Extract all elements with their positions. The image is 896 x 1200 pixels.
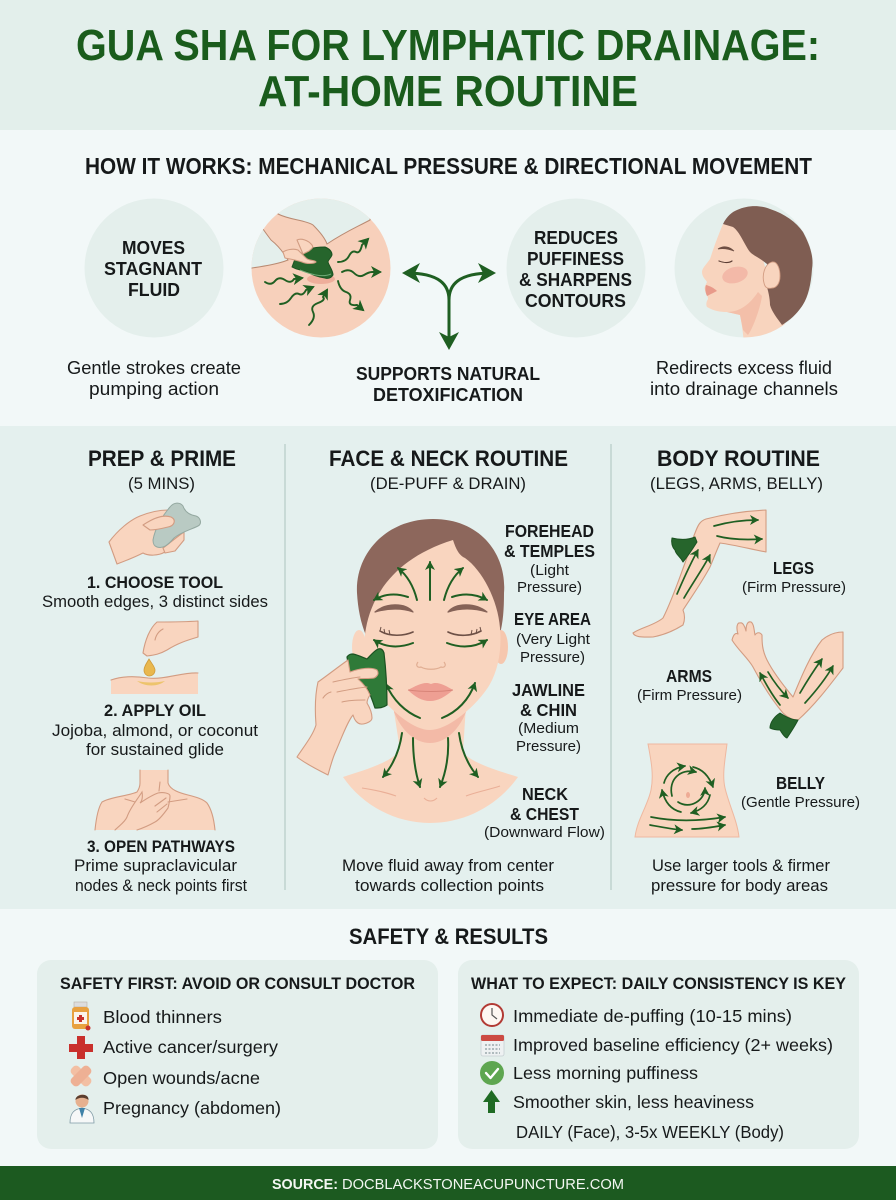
circle: moves stagnant fluid [84, 198, 224, 338]
circle: moves stagnant fluid: STAGNANT [104, 259, 202, 279]
footer: source: SOURCE: [272, 1176, 338, 1193]
arrow: three-way direction [406, 273, 492, 346]
caption: body routine [651, 857, 830, 895]
column: body routine [633, 446, 860, 895]
circle: reduces puffiness and sharpens contours: & SHARPENS [519, 270, 632, 290]
heading: prep and prime [88, 446, 236, 493]
labels: neck and chest [484, 784, 605, 841]
labels: eye area: Pressure) [520, 649, 585, 666]
heading: face and neck routine: (DE-PUFF & DRAIN) [370, 474, 526, 493]
heading: prep and prime: PREP & PRIME [88, 446, 236, 471]
text: supports natural detoxification: SUPPORTS NATURAL [356, 364, 540, 384]
illustration: leg with arrows [633, 510, 766, 637]
text: apply oil: 2. APPLY OIL [104, 701, 206, 720]
labels: eye area [514, 609, 591, 666]
text: redirects excess fluid: Redirects excess fluid [656, 358, 832, 378]
panel: routines band [0, 426, 896, 909]
illustration: belly with circular arrows [635, 744, 739, 837]
item: less morning puffiness [480, 1061, 698, 1085]
item: less morning puffiness: Less morning puffiness [513, 1063, 698, 1083]
header band [0, 0, 896, 130]
heading: body routine: BODY ROUTINE [657, 446, 820, 471]
caption: face routine: towards collection points [355, 877, 544, 895]
labels: jawline and chin: (Medium [518, 720, 579, 737]
label: legs [742, 558, 846, 596]
text: apply oil [52, 701, 258, 759]
labels: neck and chest: (Downward Flow) [484, 824, 605, 841]
labels: forehead and temples: (Light [530, 562, 570, 579]
panel: how it works [67, 153, 838, 405]
labels: eye area: EYE AREA [514, 609, 591, 629]
caption: body routine: Use larger tools & firmer [652, 857, 830, 875]
title: GUA SHA FOR LYMPHATIC DRAINAGE: [76, 21, 820, 70]
labels: jawline and chin: Pressure) [516, 738, 581, 755]
panel heading: what to expect: WHAT TO EXPECT: DAILY CONSISTENCY IS KEY [471, 974, 847, 993]
caption: face routine: Move fluid away from center [342, 857, 555, 875]
circle: moves stagnant fluid: FLUID [128, 280, 180, 300]
icon: hand on chest [95, 770, 215, 830]
labels: eye area: (Very Light [516, 631, 591, 648]
labels: jawline and chin: & CHIN [520, 700, 577, 720]
text: choose tool: 1. CHOOSE TOOL [87, 573, 223, 592]
text: frequency: DAILY (Face), 3-5x WEEKLY (Body) [516, 1122, 784, 1142]
icon: oil drop on skin [111, 621, 198, 694]
text: gentle strokes: pumping action [89, 379, 219, 399]
heading: body routine: (LEGS, ARMS, BELLY) [650, 474, 823, 493]
label: arms [637, 666, 742, 704]
text: open pathways: Prime supraclavicular [74, 857, 238, 875]
label: belly [741, 773, 860, 811]
panel heading: safety first: SAFETY FIRST: AVOID OR CONSULT DOCTOR [60, 974, 415, 993]
text: redirects excess fluid: into drainage channels [650, 379, 838, 399]
text: choose tool: Smooth edges, 3 distinct sides [42, 593, 268, 611]
title [76, 21, 820, 116]
labels: forehead and temples: & TEMPLES [504, 541, 595, 561]
labels: neck and chest: NECK [522, 784, 568, 804]
label: legs: LEGS [773, 558, 814, 578]
title: AT-HOME ROUTINE [258, 67, 638, 116]
caption: face routine [342, 857, 555, 895]
heading: prep and prime: (5 MINS) [128, 474, 195, 493]
labels: jawline and chin: JAWLINE [512, 680, 585, 700]
column: prep and prime [42, 446, 268, 895]
text: choose tool [42, 573, 268, 611]
text: supports natural detoxification [356, 364, 540, 405]
item: active cancer or surgery [69, 1036, 278, 1059]
text: open pathways: nodes & neck points first [75, 877, 247, 895]
text: apply oil: Jojoba, almond, or coconut [52, 722, 258, 740]
item: active cancer or surgery: Active cancer/surgery [103, 1037, 278, 1057]
heading: body routine [650, 446, 823, 493]
label: belly: BELLY [776, 773, 825, 793]
icon: hand holding jade tool [297, 649, 387, 775]
text: redirects excess fluid [650, 358, 838, 399]
panel: what to expect [458, 960, 859, 1149]
icon: hand holding tool [109, 503, 200, 564]
item: blood thinners [72, 1002, 222, 1030]
label: arms: (Firm Pressure) [637, 687, 742, 704]
item: open wounds or acne [69, 1064, 260, 1088]
text: gentle strokes [67, 358, 241, 399]
illustration: face with drainage arrows [297, 519, 518, 823]
footer: source: DOCBLACKSTONEACUPUNCTURE.COM [342, 1176, 624, 1193]
item: open wounds or acne: Open wounds/acne [103, 1068, 260, 1088]
item: smoother skin: Smoother skin, less heaviness [513, 1092, 754, 1112]
circle: reduces puffiness and sharpens contours: CONTOURS [525, 291, 626, 311]
circle: reduces puffiness and sharpens contours [506, 198, 646, 338]
heading: face and neck routine: FACE & NECK ROUTINE [329, 446, 568, 471]
illustration: face profile [674, 198, 814, 345]
circle: reduces puffiness and sharpens contours: PUFFINESS [527, 249, 624, 269]
text: open pathways [74, 837, 247, 895]
text: supports natural detoxification: DETOXIFICATION [373, 385, 523, 405]
label: legs: (Firm Pressure) [742, 579, 846, 596]
labels: jawline and chin [512, 680, 585, 755]
item: improved baseline efficiency: Improved baseline efficiency (2+ weeks) [513, 1035, 833, 1055]
labels: forehead and temples [504, 521, 595, 596]
illustration: arm with arrows [732, 622, 843, 738]
label: belly: (Gentle Pressure) [741, 794, 860, 811]
text: open pathways: 3. OPEN PATHWAYS [87, 837, 235, 856]
text: gentle strokes: Gentle strokes create [67, 358, 241, 378]
caption: body routine: pressure for body areas [651, 877, 828, 895]
labels: forehead and temples: Pressure) [517, 579, 582, 596]
heading: face and neck routine [329, 446, 568, 493]
illustration: gua sha on skin with fluid arrows [245, 190, 390, 338]
item: immediate de-puffing: Immediate de-puffing (10-15 mins) [513, 1006, 792, 1026]
labels: neck and chest: & CHEST [510, 804, 579, 824]
circle: reduces puffiness and sharpens contours: REDUCES [534, 228, 618, 248]
label: arms: ARMS [666, 666, 712, 686]
item: pregnancy [70, 1094, 281, 1123]
text: apply oil: for sustained glide [86, 741, 224, 759]
circle: moves stagnant fluid: MOVES [122, 238, 185, 258]
heading: safety and results: SAFETY & RESULTS [349, 924, 548, 949]
item: pregnancy: Pregnancy (abdomen) [103, 1098, 281, 1118]
panel: safety first [37, 960, 438, 1149]
heading: how it works: HOW IT WORKS: MECHANICAL PRESSURE & DIRECTIONAL MOVEMENT [85, 153, 812, 179]
footer: source [0, 1166, 896, 1200]
column: face and neck routine [297, 446, 605, 895]
labels: forehead and temples: FOREHEAD [505, 521, 594, 541]
item: blood thinners: Blood thinners [103, 1007, 222, 1027]
